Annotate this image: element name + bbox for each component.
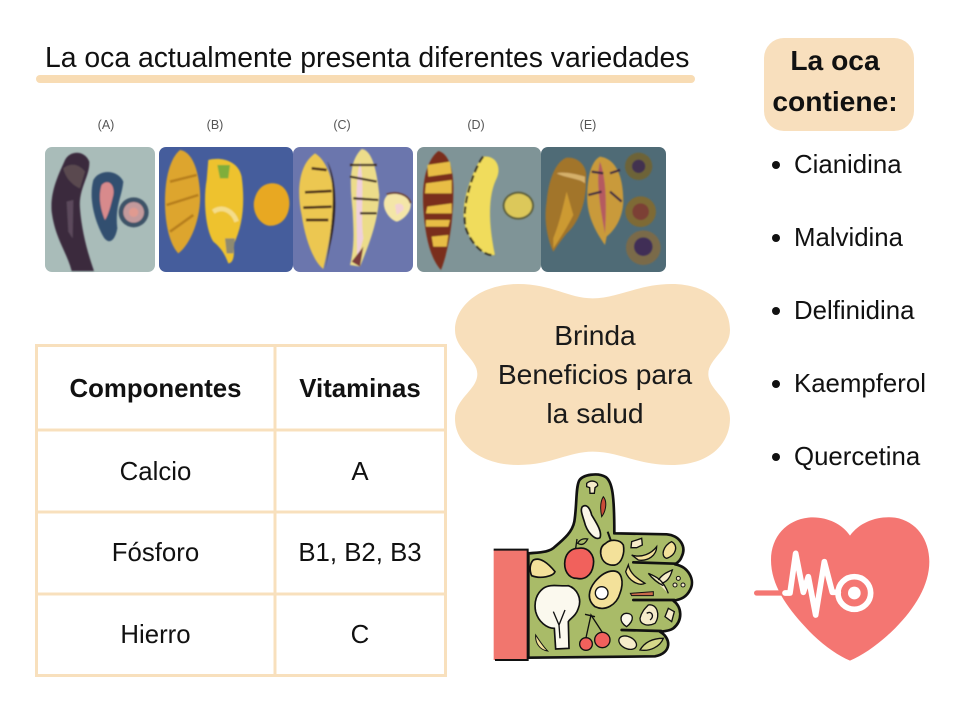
list of compounds [772,151,926,471]
small foods [631,538,642,548]
apple [565,548,594,579]
title: La oca actualmente presenta diferentes variedades [45,42,689,74]
cloud text: Brinda [554,319,636,351]
cell: B1, B2, B3: B1, B2, B3 [298,539,422,567]
icon: heart with heartbeat [754,517,930,661]
cell: Calcio: Calcio [120,458,191,486]
hand [528,474,692,658]
photo label E: (E) [580,118,596,132]
item: Cianidina: Cianidina [794,151,902,179]
pear [530,559,555,577]
item: Malvidina: Malvidina [794,224,903,252]
cherries [580,638,592,650]
broccoli [535,585,580,649]
item: Kaempferol: Kaempferol [794,370,926,398]
photo label D: (D) [467,118,485,132]
chili [601,497,606,517]
cell: Hierro: Hierro [120,621,191,649]
box heading: contiene: [772,85,898,117]
cell: C: C [351,621,369,649]
cell: Fósforo: Fósforo [112,539,199,567]
title underline [36,75,695,83]
mushroom [587,481,598,493]
box heading [772,44,898,117]
box heading: La oca [790,44,880,76]
photo label C: (C) [333,118,351,132]
item: Quercetina: Quercetina [794,443,920,471]
cloud text: Beneficios para [498,358,692,390]
photo label A: (A) [98,118,114,132]
pepper [601,540,624,565]
photo B [159,147,293,272]
header: Componentes: Componentes [70,375,242,403]
cell: A: A [351,458,369,486]
box: La oca contiene [764,38,914,131]
icon: thumbs up made of food [494,473,694,661]
avocado [589,571,622,608]
photo A [45,147,155,272]
table: componentes y vitaminas [35,344,447,677]
photo C [293,147,413,272]
cloud callout: beneficios [455,284,730,465]
cuff [494,550,528,660]
photo D [417,147,541,272]
header: Vitaminas: Vitaminas [299,375,421,403]
item: Delfinidina: Delfinidina [794,297,914,325]
photo label B: (B) [207,118,223,132]
white radish [581,506,601,538]
photo E [541,147,666,272]
cloud text: la salud [546,397,644,429]
cloud text [498,319,692,429]
